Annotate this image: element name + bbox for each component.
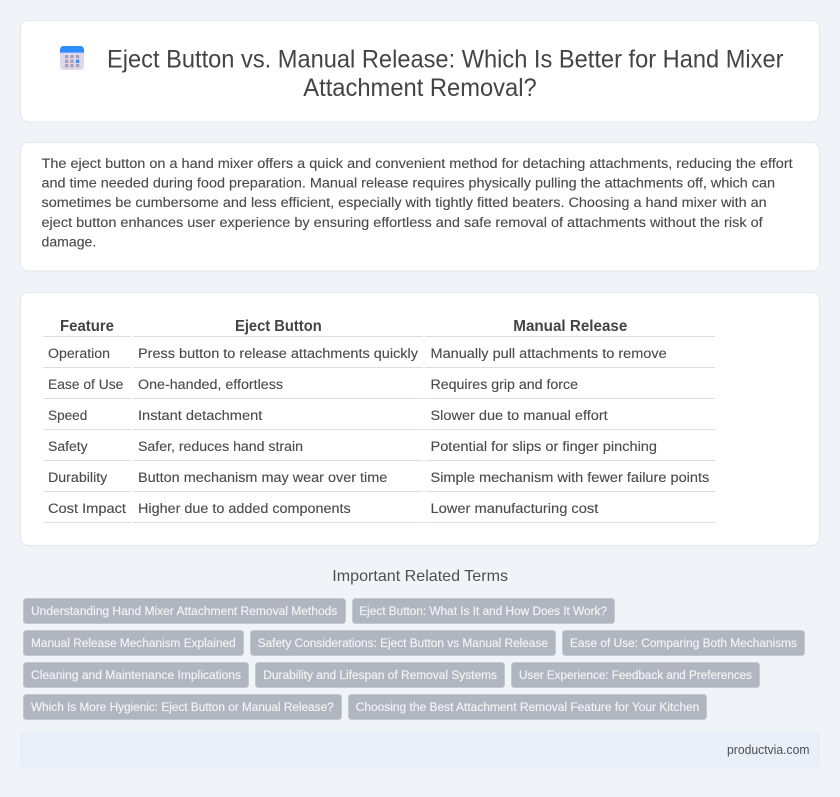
table row: ease of use: Ease of Use	[48, 377, 123, 393]
table header row: Manual Release	[513, 318, 627, 335]
table header row	[43, 318, 715, 337]
table row: speed	[43, 408, 715, 430]
text block: introduction: The eject button on a hand mixer offers a quick and convenient method for detaching attachments, reducing the effort	[42, 156, 793, 172]
table row: operation: Operation	[48, 346, 110, 362]
table row: operation	[43, 346, 715, 368]
table row: durability: Button mechanism may wear over time	[138, 470, 387, 486]
tag: user experience	[512, 662, 760, 688]
footer	[20, 733, 820, 767]
title: Attachment Removal?	[303, 74, 537, 102]
tag: hygiene	[24, 694, 342, 720]
table row: cost impact: Cost Impact	[48, 501, 126, 517]
tag: ease of use	[562, 630, 804, 656]
table row: operation: Manually pull attachments to remove	[430, 346, 667, 362]
text block: introduction: sometimes be cumbersome and less efficient, especially with tightly fitted beaters. Choosing a hand mixer with an	[42, 195, 767, 211]
tag: cleaning and maintenance	[24, 662, 248, 688]
tag: manual release mechanism	[24, 630, 244, 656]
panel: header	[20, 20, 820, 122]
tag: hygiene: Which Is More Hygienic: Eject Button or Manual Release?	[31, 700, 334, 714]
table row: durability: Durability	[48, 470, 108, 486]
tag: ease of use: Ease of Use: Comparing Both Mechanisms	[570, 636, 797, 650]
title	[107, 46, 784, 102]
tag: understanding removal methods: Understanding Hand Mixer Attachment Removal Methods	[31, 604, 337, 618]
text block: introduction	[42, 156, 793, 250]
panel: comparison table	[20, 292, 820, 546]
tag: eject button explained	[352, 598, 614, 624]
tag: user experience: User Experience: Feedback and Preferences	[519, 668, 752, 682]
text block: introduction: damage.	[42, 234, 96, 250]
table row: ease of use: Requires grip and force	[430, 377, 578, 393]
tag: durability and lifespan: Durability and Lifespan of Removal Systems	[263, 668, 497, 682]
tag: choosing the best feature: Choosing the Best Attachment Removal Feature for Your Kitchen	[356, 700, 699, 714]
table header row: Eject Button	[235, 318, 322, 335]
table row: speed: Speed	[48, 408, 87, 424]
table row: ease of use: One-handed, effortless	[138, 377, 283, 393]
table row: cost impact	[43, 501, 715, 523]
table row: speed: Instant detachment	[138, 408, 262, 424]
table row: safety: Safety	[48, 439, 89, 455]
table row: safety: Potential for slips or finger pinching	[430, 439, 657, 455]
footer: productvia.com	[727, 743, 810, 757]
tag: understanding removal methods	[24, 598, 346, 624]
icon: calendar grid	[60, 46, 84, 70]
table row: operation: Press button to release attachments quickly	[138, 346, 419, 362]
tag: manual release mechanism: Manual Release Mechanism Explained	[31, 636, 236, 650]
table row: ease of use	[43, 377, 715, 399]
table row: safety	[43, 439, 715, 461]
tag: choosing the best feature	[348, 694, 706, 720]
table row: cost impact: Lower manufacturing cost	[430, 501, 598, 517]
table row: cost impact: Higher due to added components	[138, 501, 351, 517]
table row: speed: Slower due to manual effort	[430, 408, 608, 424]
tag: cleaning and maintenance: Cleaning and Maintenance Implications	[31, 668, 241, 682]
table row: durability: Simple mechanism with fewer failure points	[430, 470, 709, 486]
panel: related term tags	[24, 598, 804, 720]
table header row: Feature	[60, 318, 114, 335]
text block: introduction: eject button enhances user experience by ensuring effortless and safe removal of attachments without the risk of	[42, 215, 763, 231]
panel: introduction text	[20, 142, 820, 271]
tag: eject button explained: Eject Button: What Is It and How Does It Work?	[359, 604, 607, 618]
heading: important related terms: Important Related Terms	[332, 568, 508, 585]
tag: safety considerations	[250, 630, 556, 656]
table row: durability	[43, 470, 715, 492]
title: Eject Button vs. Manual Release: Which Is Better for Hand Mixer	[107, 46, 784, 74]
tag: safety considerations: Safety Considerations: Eject Button vs Manual Release	[258, 636, 548, 650]
tag: durability and lifespan	[256, 662, 504, 688]
text block: introduction: and time needed during food preparation. Manual release requires physically pulling the attachments off, which can	[42, 176, 775, 192]
table row: safety: Safer, reduces hand strain	[138, 439, 303, 455]
